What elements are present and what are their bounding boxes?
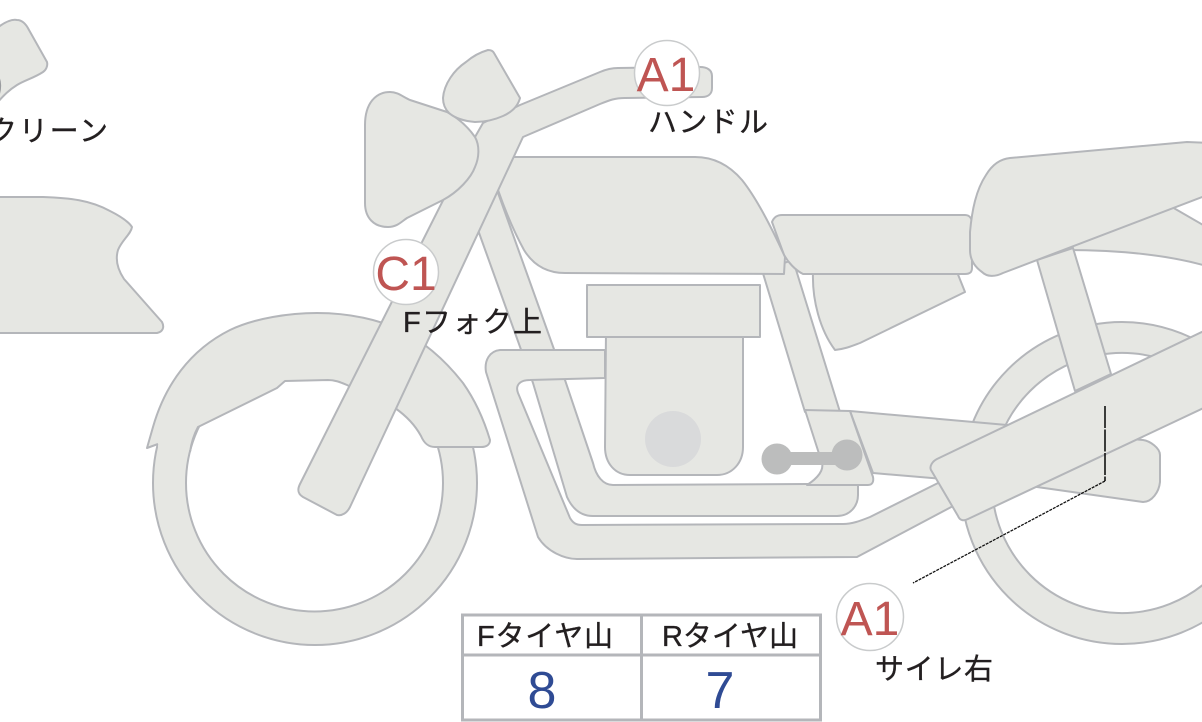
engine cover circle xyxy=(645,411,701,467)
badge: A1 muffler right: A1 xyxy=(841,593,899,646)
badge: A1 muffler right xyxy=(836,584,904,650)
label: muffler right: サイレ右 xyxy=(875,653,993,686)
value: front tire tread: 8 xyxy=(528,662,556,720)
front fender xyxy=(147,313,490,452)
value: rear tire tread: 7 xyxy=(706,662,734,720)
exhaust pipe xyxy=(486,350,955,559)
swingarm xyxy=(850,411,1160,502)
badge: C1 front fork: C1 xyxy=(375,248,437,301)
cropped part: top-left shape xyxy=(0,20,47,103)
rear shock absorber xyxy=(1037,248,1111,391)
leader line: muffler xyxy=(913,406,1105,583)
muffler xyxy=(930,328,1202,520)
front fork and handlebar xyxy=(298,67,712,515)
rear fender xyxy=(1060,203,1202,267)
footpeg linkage xyxy=(762,440,862,474)
rear frame tube xyxy=(762,260,840,412)
table header: front tire tread: Fタイヤ山 xyxy=(477,621,613,653)
frame down tube xyxy=(478,190,858,516)
engine top block xyxy=(587,285,760,337)
meter xyxy=(443,50,520,122)
tire tread table xyxy=(462,615,821,720)
frame plate xyxy=(805,410,873,485)
label: front fork upper: Fフォク上 xyxy=(403,307,542,339)
side cover xyxy=(813,272,965,350)
tank xyxy=(498,157,785,274)
front seat xyxy=(772,215,972,274)
headlight xyxy=(365,92,478,227)
rear seat xyxy=(970,142,1202,276)
front wheel xyxy=(153,321,477,645)
label: handlebar: ハンドル xyxy=(648,107,768,139)
cropped part: left body shape xyxy=(0,197,163,333)
badge: A1 handlebar: A1 xyxy=(637,49,695,102)
rear wheel xyxy=(961,322,1202,644)
engine lower case xyxy=(605,330,743,475)
table header: rear tire tread: Rタイヤ山 xyxy=(662,621,798,653)
